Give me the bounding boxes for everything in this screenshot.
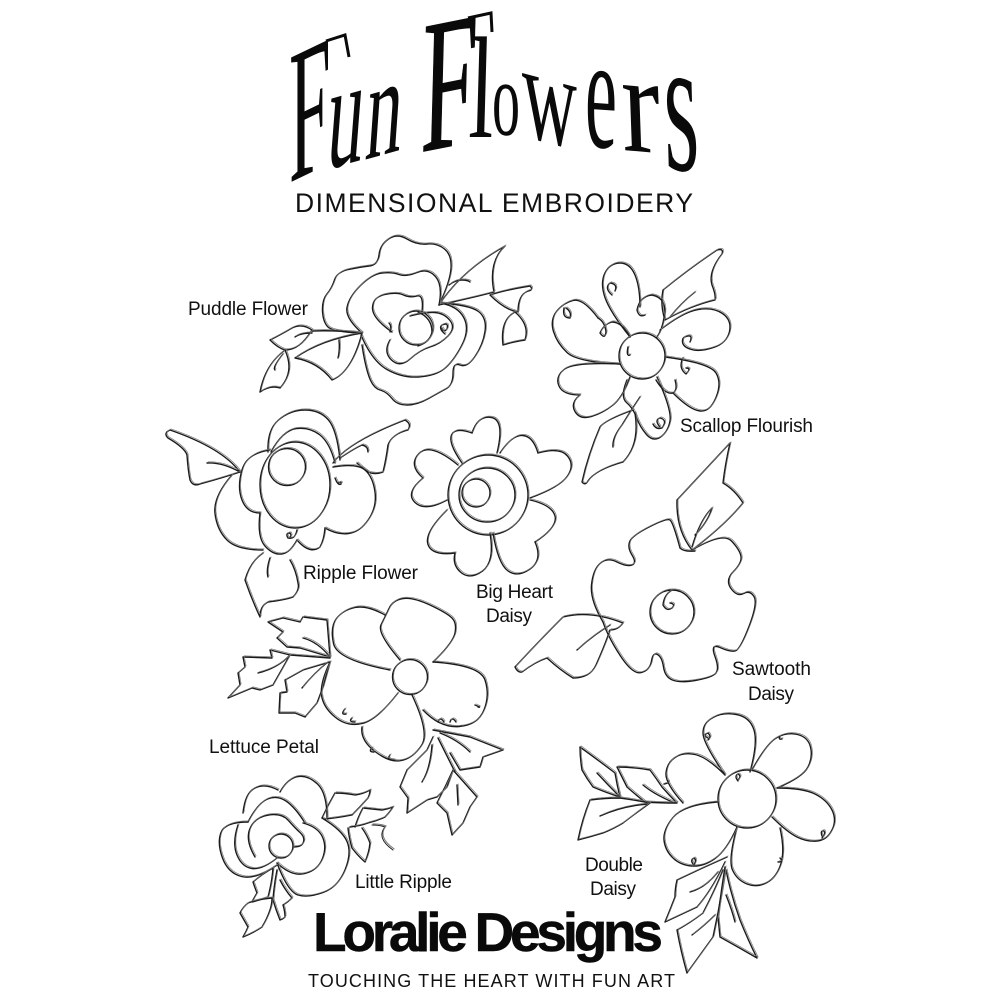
label: Puddle Flower: Puddle Flower (188, 299, 309, 320)
leaf (252, 868, 273, 902)
label: Scallop Flourish: Scallop Flourish (680, 416, 813, 437)
title: Fun Flowers: F (289, 0, 331, 224)
label: Double Daisy (585, 855, 643, 900)
leaf: right (333, 420, 409, 474)
title: Fun Flowers: n (362, 24, 409, 191)
leaf (437, 770, 477, 835)
leaf (439, 246, 505, 305)
title: Fun Flowers: w (522, 15, 577, 179)
label: Sawtooth Daisy (732, 659, 811, 705)
subtitle: DIMENSIONAL EMBROIDERY (295, 188, 693, 218)
leaf (268, 617, 330, 657)
tagline: TOUCHING THE HEART WITH FUN ART (308, 971, 675, 991)
leaf (580, 747, 620, 797)
label: Big Heart Daisy: Daisy (486, 606, 532, 627)
flower: Little Ripple (219, 775, 394, 937)
title: Fun Flowers: u (322, 23, 372, 204)
leaf: bottom (245, 553, 298, 617)
title: Fun Flowers: r (619, 24, 662, 184)
label: Sawtooth Daisy: Sawtooth (732, 659, 811, 680)
title: Fun Flowers (289, 0, 701, 224)
leaf: left (515, 615, 623, 678)
flower: Puddle Flower (260, 235, 533, 405)
leaf (228, 650, 330, 698)
leaf (279, 662, 330, 717)
label: Big Heart Daisy: Big Heart (476, 582, 554, 603)
flower: Lettuce Petal (228, 597, 504, 835)
leaf: top (677, 443, 743, 550)
flower: Big Heart Daisy (411, 416, 572, 576)
label: Sawtooth Daisy: Daisy (748, 684, 794, 705)
title: Fun Flowers: e (585, 3, 617, 184)
label: Double Daisy: Daisy (590, 879, 636, 900)
label: Double Daisy: Double (585, 855, 643, 876)
label: Ripple Flower: Ripple Flower (303, 563, 419, 584)
title: Fun Flowers: s (661, 0, 701, 214)
flower: Ripple Flower (166, 409, 411, 617)
flower: Double Daisy (578, 713, 836, 973)
title: Fun Flowers: o (492, 40, 520, 159)
leaf (665, 857, 727, 922)
label: Little Ripple: Little Ripple (355, 872, 452, 893)
flower: Sawtooth Daisy (515, 442, 756, 682)
label: Lettuce Petal: Lettuce Petal (209, 737, 319, 758)
brand: Loralie Designs: Loralie Designs (313, 901, 663, 963)
leaf (433, 730, 503, 770)
leaf (295, 333, 362, 380)
leaf (400, 737, 452, 813)
label: Big Heart Daisy (476, 582, 554, 627)
flower: Scallop Flourish (552, 248, 731, 484)
title: Fun Flowers: l (467, 8, 497, 169)
leaf: left (166, 430, 240, 485)
leaf (322, 790, 370, 819)
